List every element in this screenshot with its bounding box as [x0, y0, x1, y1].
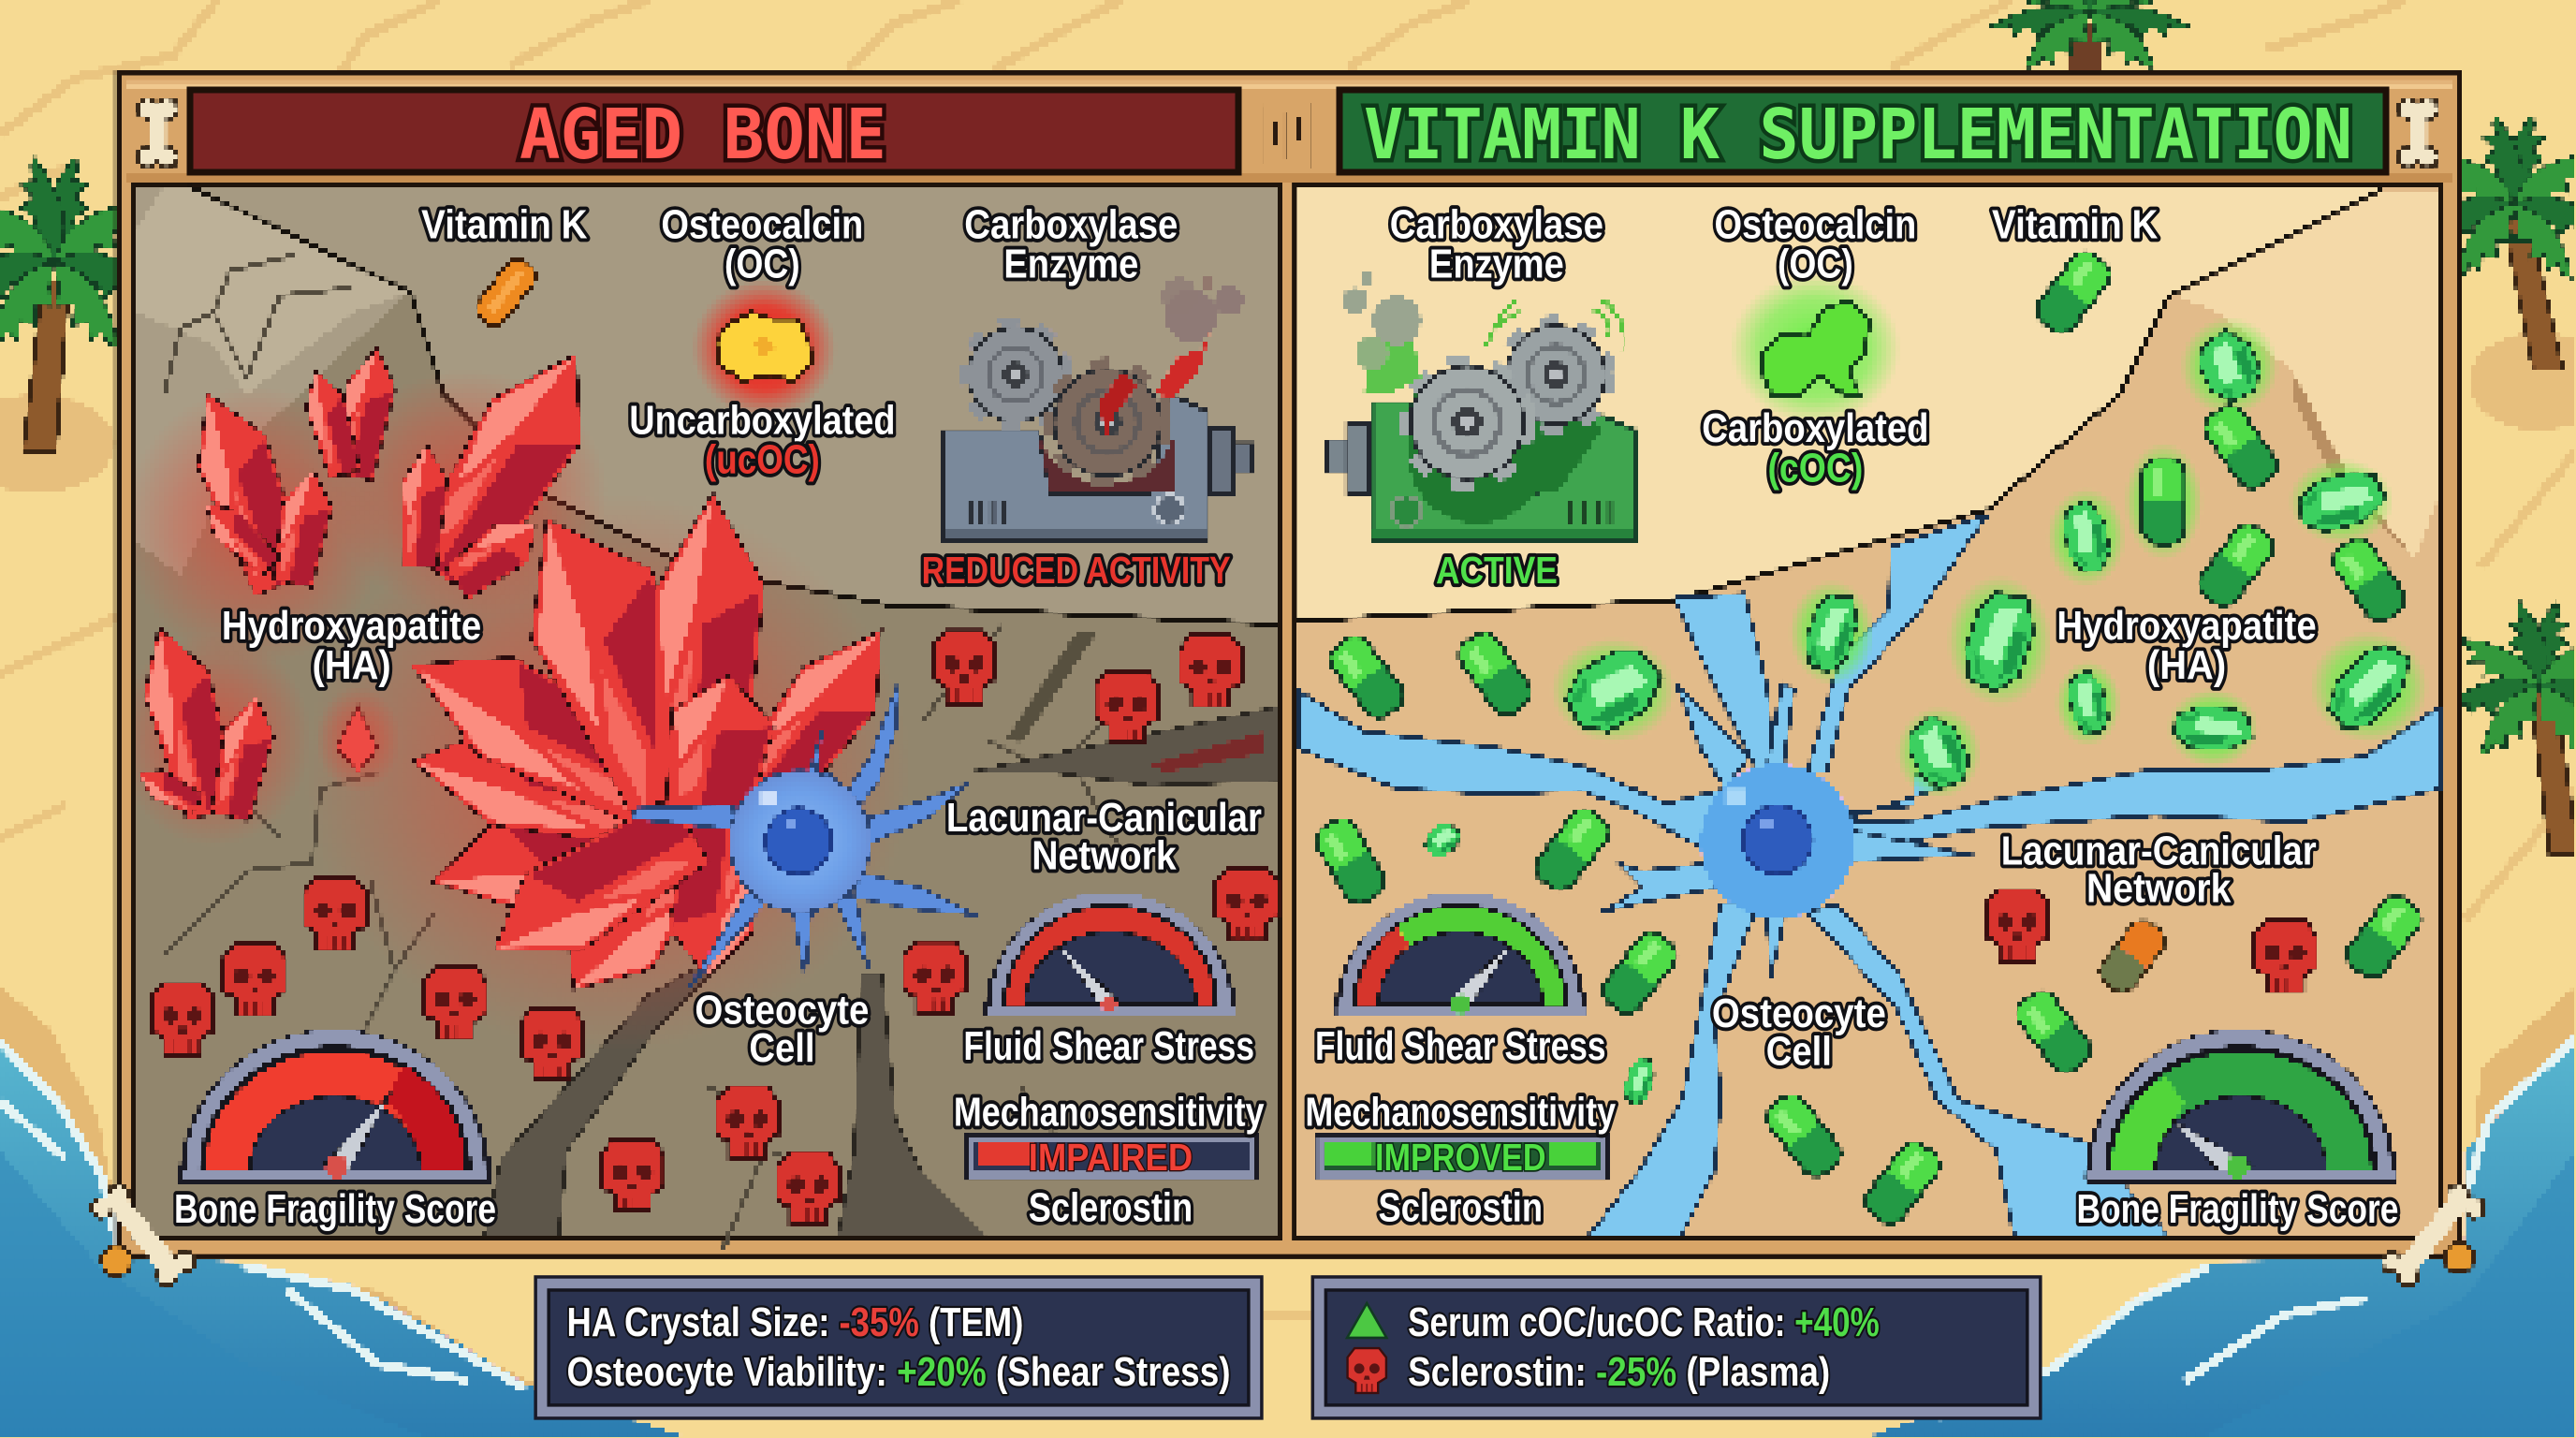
icon: green up triangle: [1347, 1303, 1386, 1338]
label: hydroxyapatite: [222, 603, 481, 688]
label: active: ACTIVE: [1436, 549, 1558, 592]
label: lacunar-canicular network: [946, 795, 1262, 879]
label: hydroxyapatite: Hydroxyapatite: [222, 603, 481, 649]
label: hydroxyapatite: Hydroxyapatite: [2056, 603, 2317, 649]
label: reduced activity: REDUCED ACTIVITY: [922, 549, 1231, 592]
vitamin k capsule orange: [471, 254, 541, 331]
corner bones and coins: [92, 98, 2484, 1285]
label: vitamin k: Vitamin K: [1992, 202, 2159, 248]
label: osteocalcin: [1714, 202, 1916, 287]
label: fluid shear stress: Fluid Shear Stress: [963, 1023, 1254, 1069]
degraded orange capsule: [2094, 915, 2172, 998]
panel labels: aged bone: [174, 202, 1265, 1232]
label: carboxylated coc: [1702, 405, 1928, 491]
red glow: [136, 379, 871, 1034]
glow spots: [1551, 272, 2428, 799]
label: lacunar-canicular network: [2001, 828, 2317, 912]
osteocyte body: [633, 682, 977, 986]
label: carboxylase enzyme: [1390, 202, 1603, 287]
blue canals: [1298, 514, 2439, 1236]
label: hydroxyapatite: [2056, 603, 2317, 688]
label: mechanosensitivity: Mechanosensitivity: [1305, 1089, 1617, 1135]
bar: mechanosensitivity impaired: [968, 1134, 1257, 1180]
panel art: bone matrix, crystals and cell: [115, 184, 1280, 1249]
crystals and capsules: [1310, 245, 2427, 1230]
dark eroded canals: [485, 945, 739, 1236]
label: carboxylated coc: Carboxylated: [1702, 405, 1928, 451]
stats panel: serum ratio and sclerostin: [1312, 1277, 2041, 1418]
uncarboxylated glow: [692, 279, 836, 418]
skulls: [151, 631, 1278, 1225]
label: carboxylated coc: (cOC): [1767, 445, 1863, 491]
label: mechanosensitivity: Mechanosensitivity: [954, 1089, 1265, 1135]
heading bar: aged bone: AGED BONE: [520, 95, 886, 175]
heading bar: vitamin k supplementation: VITAMIN K SUPPLEMENTATION: [1364, 95, 2352, 175]
panel art: healthy bone, canals, capsules: [1296, 184, 2441, 1238]
shadows: [0, 394, 115, 493]
palm trunks: [23, 279, 69, 452]
label: vitamin k: Vitamin K: [421, 202, 588, 248]
label: osteocyte cell: Osteocyte: [1712, 990, 1886, 1036]
label: lacunar-canicular network: Lacunar-Canicular: [946, 795, 1262, 841]
stat: plasma sclerostin: Sclerostin: -25% (Plasma): [1408, 1349, 1830, 1395]
stat: HA crystal size: HA Crystal Size: -35% (TEM): [567, 1299, 1023, 1345]
label: sclerostin: Sclerostin: [1379, 1184, 1543, 1230]
stat: osteocyte viability: Osteocyte Viability: +20% (Shear Stress): [567, 1349, 1231, 1395]
label: osteocalcin: (OC): [1778, 242, 1853, 287]
label: lacunar-canicular network: Network: [1032, 833, 1177, 879]
gauge: fluid shear stress right: [1334, 892, 1587, 1016]
gauge: fluid shear stress: [984, 892, 1237, 1016]
icon: red skull: [1348, 1348, 1386, 1393]
label: impaired: IMPAIRED: [1029, 1136, 1193, 1179]
label: carboxylase enzyme: [964, 202, 1178, 287]
label: osteocalcin: [661, 202, 863, 287]
panel: aged bone: [115, 184, 1280, 1249]
label: fluid shear stress: Fluid Shear Stress: [1315, 1023, 1606, 1069]
carboxylase enzyme machine, active: [1327, 271, 1636, 539]
gauge: bone fragility score right: [2085, 1029, 2397, 1181]
uncarboxylated osteocalcin blob: [716, 313, 812, 381]
heading bar: aged bone: [190, 90, 1238, 175]
label: carboxylase enzyme: Carboxylase: [1390, 202, 1603, 248]
label: osteocyte cell: Cell: [1766, 1028, 1832, 1075]
label: osteocyte cell: Osteocyte: [695, 988, 869, 1034]
carboxylated osteocalcin blob: [1761, 301, 1869, 394]
label: osteocyte cell: [695, 988, 869, 1071]
label: carboxylase enzyme: Enzyme: [1003, 242, 1138, 287]
bar: mechanosensitivity improved: [1316, 1134, 1606, 1180]
label: uncarboxylated ucoc: [629, 397, 896, 483]
stats panel: crystal size and viability: [535, 1277, 1262, 1418]
crystal clusters: [128, 329, 916, 1020]
label: sclerostin: Sclerostin: [1029, 1184, 1193, 1230]
label: uncarboxylated ucoc: (ucOC): [705, 437, 820, 483]
label: lacunar-canicular network: Lacunar-Canicular: [2001, 828, 2317, 873]
label: improved: IMPROVED: [1375, 1136, 1546, 1179]
label: osteocyte cell: [1712, 990, 1886, 1075]
label: osteocyte cell: Cell: [749, 1025, 815, 1071]
gauge: bone fragility score: [179, 1029, 491, 1181]
panel: vitamin k supplementation: [1296, 184, 2441, 1238]
label: bone fragility score: Bone Fragility Score: [174, 1186, 496, 1232]
skulls right: [1986, 889, 2317, 992]
label: lacunar-canicular network: Network: [2086, 866, 2232, 912]
label: osteocalcin: Osteocalcin: [661, 202, 863, 248]
panel labels: vitamin k supplementation: [1305, 202, 2398, 1232]
label: hydroxyapatite: (HA): [312, 642, 391, 688]
label: osteocalcin: Osteocalcin: [1714, 202, 1916, 248]
label: osteocalcin: (OC): [724, 242, 800, 287]
label: bone fragility score: Bone Fragility Score: [2076, 1186, 2398, 1232]
label: carboxylase enzyme: Enzyme: [1429, 242, 1564, 287]
stat: serum ratio: Serum cOC/ucOC Ratio: +40%: [1408, 1299, 1880, 1345]
frame: wooden outer panel: [115, 70, 2461, 1257]
carboxylase enzyme machine, reduced: [943, 276, 1251, 539]
label: hydroxyapatite: (HA): [2147, 642, 2226, 688]
label: carboxylase enzyme: Carboxylase: [964, 202, 1178, 248]
label: uncarboxylated ucoc: Uncarboxylated: [629, 397, 896, 443]
